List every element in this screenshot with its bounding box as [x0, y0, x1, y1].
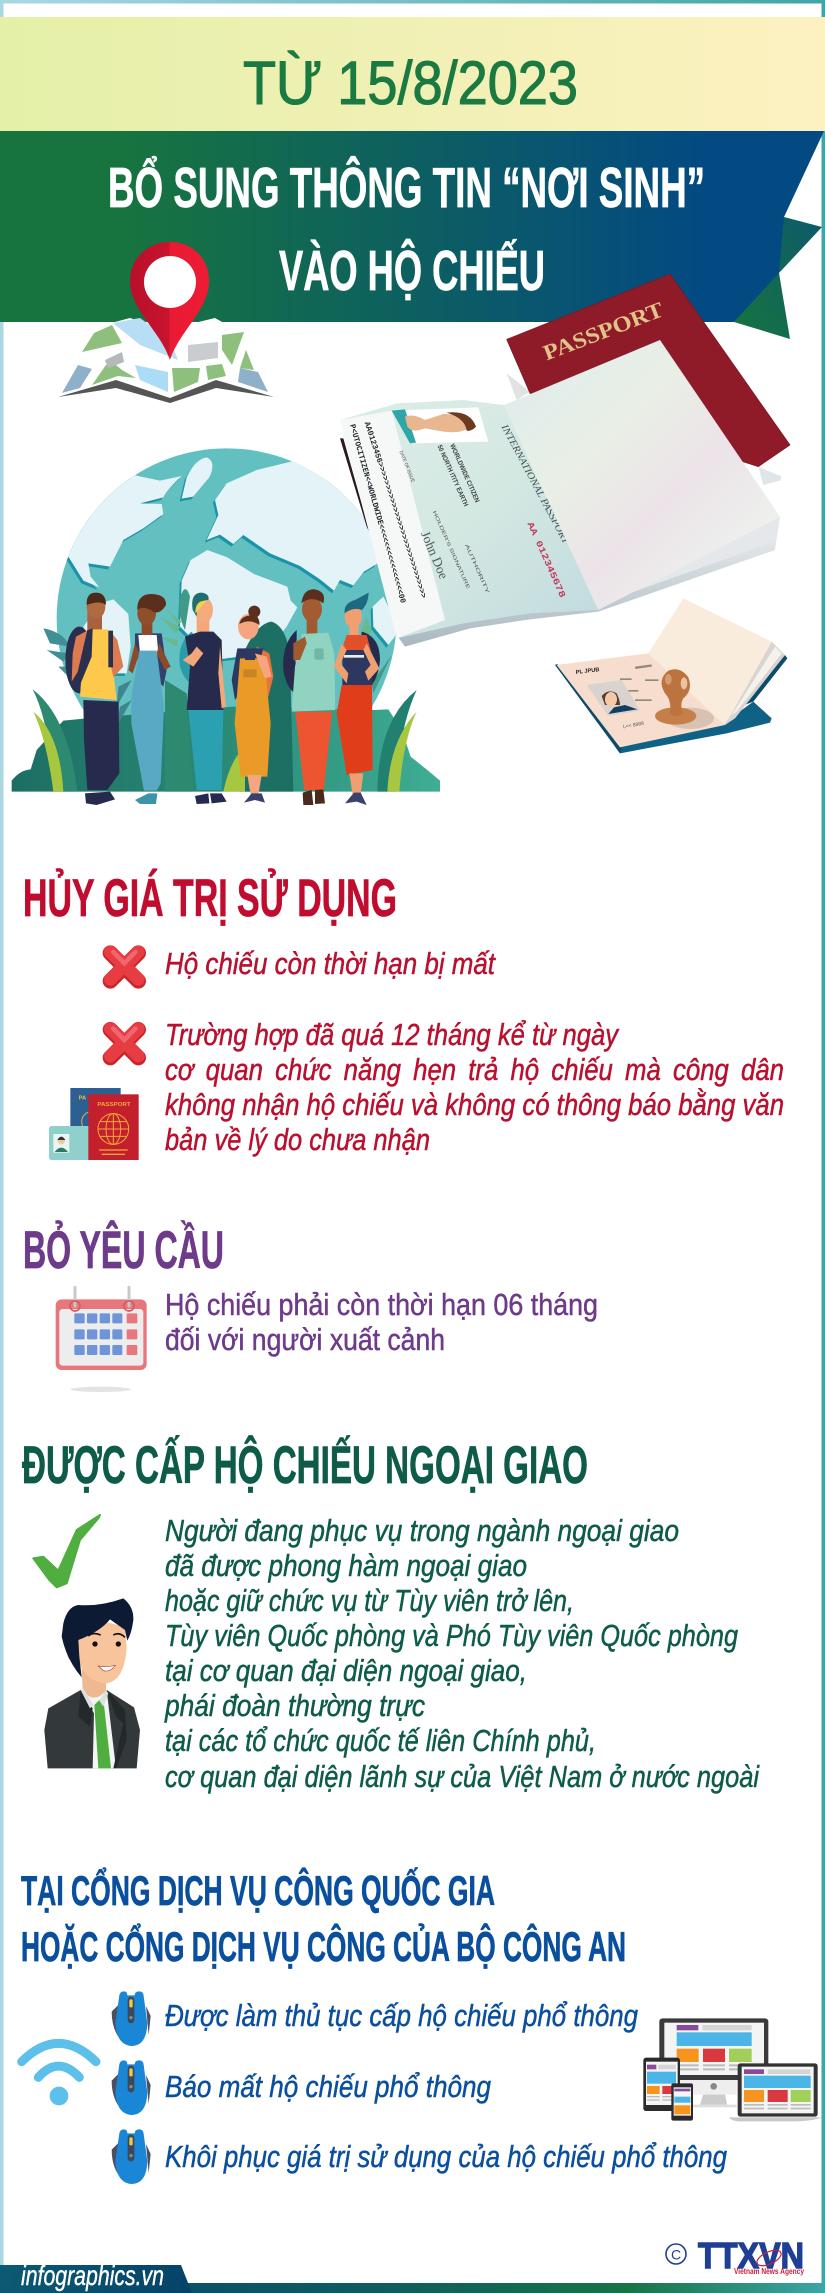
- passport data text: DATE OF ISSUE: [397, 450, 416, 484]
- page edges: [725, 642, 785, 725]
- tablet: [643, 2058, 680, 2111]
- section: cancelled validity: [23, 868, 784, 1160]
- item text 2: Báo mất hộ chiếu phổ thông: [165, 2069, 491, 2104]
- item text 1: Được làm thủ tục cấp hộ chiếu phổ thông: [165, 1998, 638, 2033]
- passport data text: HOLDER'S SIGNATURE: [431, 510, 471, 591]
- passport data text: AA0123456>>>>>>>>>>>>>>>>>>>>>>>>>>>>>>: [362, 421, 428, 600]
- desktop monitor: [659, 2018, 768, 2107]
- requirement text: Hộ chiếu phải còn thời hạn 06 tháng: [165, 1287, 598, 1322]
- body text: tại cơ quan đại diện ngoại giao,: [165, 1653, 527, 1688]
- passport data text: 50 NORTH ITITY EARTH: [436, 444, 469, 508]
- illustration: open passport: [340, 274, 790, 647]
- ribbon tail: [734, 217, 822, 339]
- panel: date band: [0, 17, 825, 131]
- item text 2: bản về lý do chưa nhận: [165, 1122, 430, 1157]
- title: date: TỪ 15/8/2023: [243, 49, 578, 117]
- person 1: yellow shirt: [65, 593, 123, 805]
- section: diplomatic passport: [22, 1434, 760, 1794]
- passport shadow and back cover: [507, 373, 530, 400]
- leaf: right dark: [377, 690, 417, 792]
- logo: TTXVN: C: [671, 2246, 681, 2262]
- item text 2: [165, 1017, 784, 1157]
- body text: hoặc giữ chức vụ từ Tùy viên trở lên,: [165, 1583, 574, 1618]
- left page: [557, 653, 725, 747]
- passport text details: [576, 664, 658, 730]
- leaf: left lime: [33, 712, 63, 792]
- item text 1: Hộ chiếu còn thời hạn bị mất: [165, 946, 496, 981]
- passport text details: PL JPUB: [576, 667, 600, 676]
- icon: responsive devices: [643, 2018, 822, 2121]
- person 3: navy tee: [179, 593, 227, 804]
- cover title: PASSPORT: [539, 296, 667, 365]
- section heading: BỎ YÊU CẦU: [23, 1219, 224, 1280]
- illustration: passport and stamp: [555, 598, 787, 753]
- passport data text: P<UTOCITIZEN<<WORLDWIDE<<<<<<<<<<<<<<<<00: [347, 423, 407, 604]
- white machine-readable strip: [340, 411, 445, 638]
- icon: wifi: [22, 2043, 96, 2105]
- passport data text: INTERNATIONAL PASSPORT: [498, 422, 572, 547]
- leaf: left dark: [33, 689, 77, 792]
- person 4: orange overalls: [232, 606, 273, 803]
- location pin: [130, 242, 209, 360]
- section: online public service portals: [21, 1865, 822, 2184]
- icon: mouse 2: [112, 2060, 151, 2115]
- section heading: TẠI CỔNG DỊCH VỤ CÔNG QUỐC GIA: [21, 1865, 495, 1914]
- rubber stamp: [655, 669, 714, 729]
- logo: TTXVN: TTXVN: [698, 2235, 804, 2276]
- person 5: mint tee: [283, 589, 335, 805]
- person 6: red skirt: [334, 593, 380, 805]
- lower page stack: [397, 542, 775, 647]
- passport data text: AUTHORITY: [463, 543, 491, 596]
- icon: map with location pin: [58, 242, 274, 403]
- icon: passports and id card: PA: [79, 1095, 86, 1101]
- blue cover: [615, 702, 772, 753]
- icon: passports and id card: [49, 1088, 139, 1160]
- body text: đã được phong hàm ngoại giao: [165, 1548, 527, 1583]
- person 2: blue overalls: [128, 594, 171, 804]
- passport data text: WORLDWIDE CITIZEN: [448, 443, 480, 504]
- footer bar: [0, 2260, 825, 2293]
- icon: green check: [33, 1515, 100, 1587]
- icon: red cross 2: [110, 1029, 138, 1058]
- section: removed requirement: [23, 1219, 598, 1392]
- icon: mouse 1: [112, 1991, 151, 2046]
- dark back cover edge: [340, 438, 370, 533]
- logo: TTXVN: Vietnam News Agency: [734, 2267, 804, 2276]
- footer website: infographics.vn: [21, 2260, 164, 2291]
- phone: [671, 2083, 693, 2121]
- passport data text: AA 012345678: [525, 520, 567, 599]
- requirement text: đối với người xuất cảnh: [165, 1322, 445, 1357]
- section heading: [21, 1865, 626, 1970]
- body text: Người đang phục vụ trong ngành ngoại giao: [165, 1513, 679, 1548]
- page block behind cover: [758, 467, 782, 485]
- globe: [56, 448, 396, 716]
- left page: [340, 400, 598, 638]
- section heading: HỦY GIÁ TRỊ SỬ DỤNG: [23, 868, 397, 928]
- heading line 2: VÀO HỘ CHIẾU: [279, 238, 545, 303]
- laptop: [729, 2063, 822, 2121]
- leaf: right lime: [387, 712, 417, 792]
- illustration: globe with group of travellers: [12, 448, 440, 805]
- item text 2: Trường hợp đã quá 12 tháng kể từ ngày: [165, 1017, 620, 1052]
- id photo: [587, 680, 640, 716]
- icon: mouse 3: [112, 2129, 151, 2184]
- body text: [164, 1513, 760, 1794]
- passport text details: L<< 8988: [623, 721, 645, 730]
- icon: passports and id card: PASSPORT: [97, 1102, 132, 1108]
- requirement text: [165, 1287, 598, 1357]
- foliage: [12, 589, 440, 792]
- item text 3: Khôi phục giá trị sử dụng của hộ chiếu phổ thông: [165, 2139, 727, 2174]
- red cover: [507, 274, 790, 467]
- right page: [648, 598, 772, 725]
- right page: [504, 340, 780, 610]
- icon: calendar: [56, 1287, 147, 1392]
- passport data text: [347, 421, 572, 604]
- icon: man in suit: [44, 1598, 140, 1768]
- body text: phái đoàn thường trực: [164, 1688, 425, 1723]
- body text: tại các tổ chức quốc tế liên Chính phủ,: [165, 1723, 596, 1758]
- passport data text: John Doe: [418, 529, 452, 581]
- icon: red cross 1: [110, 952, 138, 981]
- space under lifted right page: [598, 517, 780, 610]
- panel: main heading ribbon: [0, 131, 824, 339]
- portrait photo: [392, 407, 488, 443]
